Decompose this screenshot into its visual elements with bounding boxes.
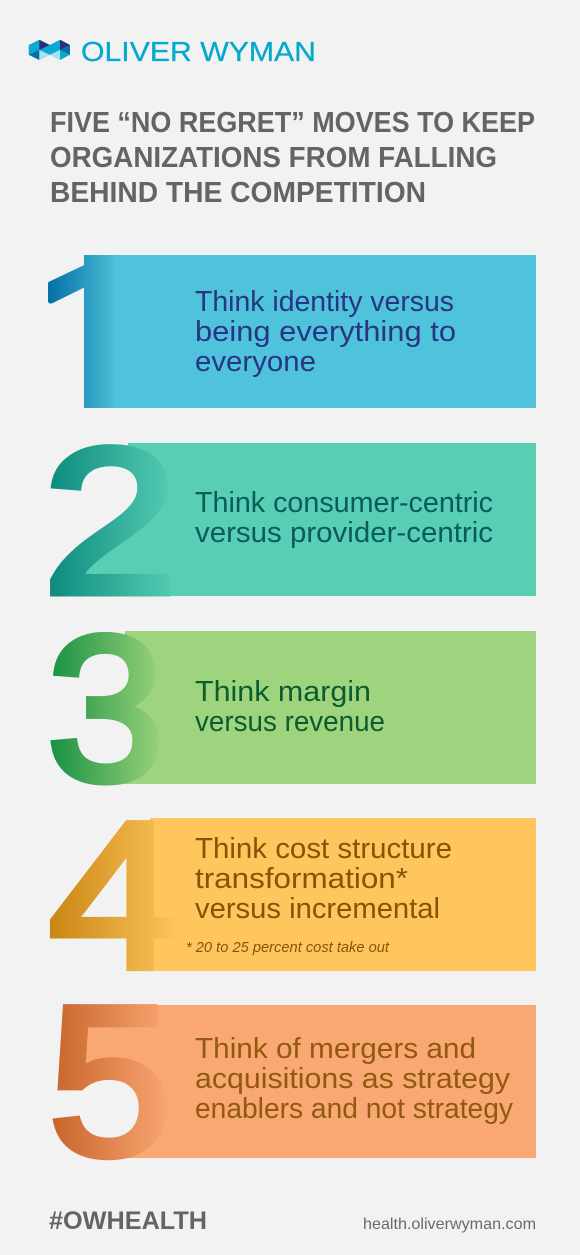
title: ORGANIZATIONS FROM FALLING — [50, 142, 497, 174]
text 5 — [195, 1033, 513, 1125]
website url: health.oliverwyman.com — [363, 1216, 536, 1233]
logo mark — [29, 40, 70, 60]
panel: move 3 — [46, 593, 536, 824]
text 4: versus incremental — [195, 893, 440, 925]
text 3 — [195, 676, 385, 738]
numeral 3: 3 — [46, 593, 165, 824]
footnote: * 20 to 25 percent cost take out — [186, 940, 390, 956]
text 5: enablers and not strategy — [195, 1093, 513, 1125]
panel: move 1 — [48, 255, 536, 408]
title — [50, 107, 535, 209]
text 1: everyone — [195, 346, 316, 378]
numeral 5: 5 — [48, 962, 172, 1200]
panel background 5 — [72, 1005, 536, 1158]
numeral 2: 2 — [42, 406, 179, 638]
text 3: versus revenue — [195, 706, 385, 738]
text 2: Think consumer-centric — [195, 487, 493, 519]
text 2: versus provider-centric — [195, 517, 493, 549]
title: BEHIND THE COMPETITION — [50, 177, 426, 209]
panel background 3 — [115, 631, 536, 784]
text 4 — [195, 833, 452, 925]
text 1: being everything to — [195, 316, 456, 348]
text 2 — [195, 487, 493, 549]
text 5: acquisitions as strategy — [195, 1063, 511, 1095]
hashtag: #OWHEALTH — [49, 1207, 207, 1235]
numeral stem 1 — [84, 255, 114, 408]
panel: move 4 — [49, 779, 536, 1013]
text 5: Think of mergers and — [195, 1033, 476, 1065]
panel: move 2 — [42, 406, 536, 638]
logo wordmark: OLIVER WYMAN — [81, 36, 316, 67]
numeral 4: 4 — [49, 779, 180, 1013]
panel background 2 — [72, 443, 536, 596]
panel background 4 — [150, 818, 536, 971]
text 1: Think identity versus — [195, 286, 454, 318]
text 1 — [195, 286, 456, 378]
numeral 1: 1 — [20, 212, 198, 457]
text 4: transformation* — [195, 863, 408, 895]
logo — [29, 36, 316, 67]
panel: move 5 — [48, 962, 536, 1200]
text 3: Think margin — [195, 676, 371, 708]
text 4: Think cost structure — [195, 833, 452, 865]
panel background 1 — [114, 255, 536, 408]
title: FIVE “NO REGRET” MOVES TO KEEP — [50, 107, 535, 139]
